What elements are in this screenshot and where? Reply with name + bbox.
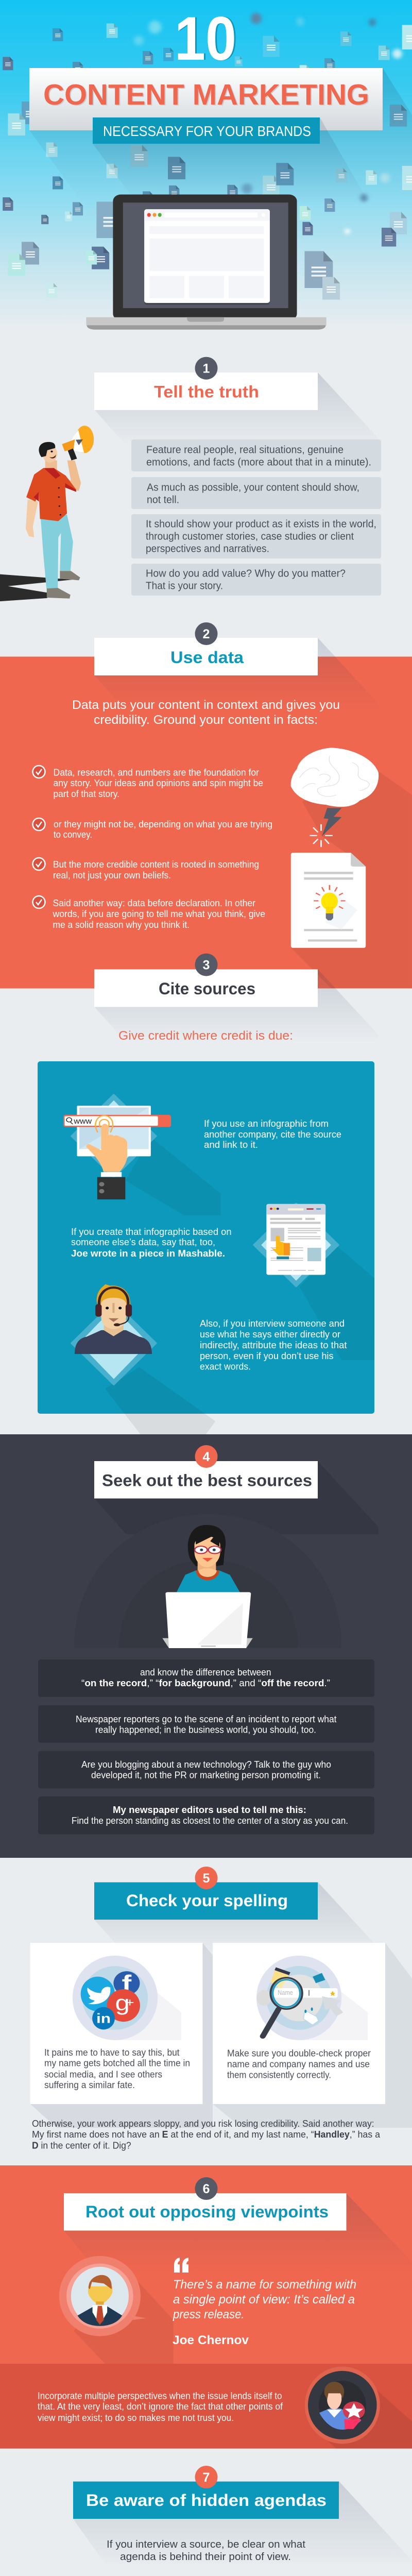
text boxes: How do you add value? Why do you matter? [146, 568, 346, 580]
number badge [195, 1867, 217, 1889]
heading card [94, 372, 318, 410]
intro text [72, 698, 340, 727]
checklist: me a solid reason why you think it. [53, 920, 190, 930]
heading card [94, 1461, 318, 1498]
icon: laptop [86, 195, 327, 330]
number badge: 4 [203, 1450, 210, 1464]
heading card [94, 970, 318, 1007]
subtitle band: NECESSARY FOR YOUR BRANDS [103, 123, 311, 139]
number badge: 7 [203, 2470, 210, 2485]
text box: newspaper reporters: Newspaper reporters go to the scene of an incident to report what [76, 1714, 337, 1724]
text: data citation [71, 1227, 232, 1259]
text box: blogging: developed it, not the PR or marketing person promoting it. [91, 1770, 321, 1781]
card: proper names [213, 1943, 385, 2104]
text: data citation: If you create that infographic based on [71, 1227, 232, 1237]
card text: social media, and I see others [44, 2069, 162, 2079]
number badge: 2 [203, 627, 210, 641]
blue panel [38, 1061, 374, 1414]
icon: social networks: in [96, 2011, 111, 2026]
checklist: But the more credible content is rooted in something [53, 859, 259, 870]
heading card [64, 2193, 346, 2231]
checklist: Data, research, and numbers are the foundation for [54, 768, 259, 778]
text boxes: It should show your product as it exists in the world, [146, 519, 376, 530]
icon: brain, lightning and idea document [291, 748, 412, 988]
intro text: Data puts your content in context and gives you [72, 698, 340, 712]
avatar: person with star badge [305, 2366, 412, 2449]
text: multiple perspectives [38, 2391, 283, 2423]
icon: woman at laptop [74, 1514, 341, 1648]
text: infographic source: If you use an infographic from [204, 1118, 329, 1129]
number badge: 6 [203, 2182, 210, 2196]
number badge: 3 [203, 958, 210, 972]
text box: editors: My newspaper editors used to tell me this: [113, 1805, 306, 1815]
text: attribution: indirectly, attribute the ideas to that [200, 1340, 347, 1350]
title number: 10 [175, 4, 236, 73]
card text: suffering a similar fate. [44, 2080, 135, 2090]
text box: newspaper reporters: really happened; in the business world, you should, too. [95, 1725, 316, 1735]
quote: There’s a name for something with [173, 2278, 356, 2292]
icon: social networks [73, 1956, 181, 2040]
text box: editors [38, 1797, 374, 1834]
text: otherwise: My first name does not have an E at the end of it, and my last name, “Handley,” has a [32, 2129, 381, 2140]
text boxes: As much as possible, your content should show, [147, 482, 359, 494]
checklist [33, 766, 272, 930]
card text: Make sure you double-check proper [227, 2048, 371, 2059]
title banner: CONTENT MARKETING [43, 78, 369, 111]
number badge: 1 [203, 362, 210, 376]
text: data citation: someone else’s data, say that, too, [71, 1237, 215, 1247]
heading card: Tell the truth [154, 382, 259, 401]
text: multiple perspectives: that. At the very least, don’t ignore the fact that other points of [38, 2401, 283, 2412]
heading card: Use data [170, 648, 244, 667]
number badge: 5 [203, 1871, 210, 1886]
icon: man with headset [72, 1284, 215, 1443]
text box: blogging: Are you blogging about a new technology? Talk to the guy who [81, 1759, 331, 1770]
heading card [94, 1883, 318, 1920]
checklist: to convey. [54, 829, 92, 840]
heading card [94, 638, 318, 675]
text: infographic source: and link to it. [204, 1140, 258, 1150]
icon: social networks: + [126, 1995, 134, 2009]
card text: name and company names and use [227, 2059, 370, 2070]
checklist: words, if you are going to tell me what you think, give [53, 909, 265, 919]
text box: blogging [38, 1751, 374, 1789]
intro text [107, 2539, 305, 2563]
panel: 1 tell the truth [0, 357, 381, 601]
card text: them consistently correctly. [227, 2070, 331, 2080]
subheading: Give credit where credit is due: [118, 1029, 293, 1043]
text box: difference [38, 1659, 374, 1697]
number badge [195, 622, 217, 645]
text: attribution: person, even if you don’t use his [200, 1351, 334, 1361]
panel: 7 be aware of hidden agendas [38, 2466, 412, 2576]
card text: It pains me to have to say this, but [44, 2047, 179, 2058]
icon: man with megaphone [0, 426, 94, 601]
text boxes: Feature real people, real situations, genuine [146, 445, 344, 456]
card text: my name gets botched all the time in [44, 2058, 190, 2068]
heading card: Seek out the best sources [102, 1471, 312, 1490]
checklist: Said another way: data before declaration. In other [53, 898, 255, 908]
number badge [195, 954, 217, 976]
icon: hand touching www bar: www [73, 1117, 92, 1126]
panel: hero [0, 0, 412, 330]
text box: difference: “on the record ,” “for background ,” and “off the record .” [81, 1678, 330, 1688]
panel: 3 cite sources [38, 954, 379, 1443]
text: otherwise [32, 2119, 381, 2150]
icon: magnifier over name field [256, 1956, 368, 2040]
quote [173, 2278, 356, 2347]
card text [227, 2048, 371, 2080]
floating document icons [3, 13, 412, 300]
panel: 5 check your spelling [30, 1867, 412, 2150]
heading card: Check your spelling [126, 1891, 288, 1910]
title banner: CONTENT MARKETING [44, 79, 370, 112]
heading card [73, 2482, 339, 2519]
card: social media [30, 1943, 202, 2104]
title number: 10 [176, 4, 238, 73]
heading card: Be aware of hidden agendas [86, 2491, 327, 2510]
quote: press release. [173, 2308, 244, 2321]
card text [44, 2047, 190, 2090]
text: multiple perspectives: view might exist; to do so makes me not trust you. [38, 2413, 234, 2423]
text: infographic source: another company, cite the source [204, 1129, 341, 1140]
icon: webpage with hand [254, 1204, 374, 1360]
heading card: Cite sources [159, 979, 255, 998]
text boxes: through customer stories, case studies or client [146, 531, 354, 543]
intro text: credibility. Ground your content in facts: [94, 713, 318, 727]
intro text: agenda is behind their point of view. [120, 2551, 291, 2563]
text: infographic source [204, 1118, 341, 1150]
text boxes: not tell. [147, 495, 179, 506]
number badge [195, 357, 217, 380]
checklist: or they might not be, depending on what you are trying [54, 819, 272, 829]
text boxes [131, 439, 381, 596]
panel: 2 use data [0, 622, 412, 988]
text: multiple perspectives: Incorporate multiple perspectives when the issue lends itself to [38, 2391, 282, 2401]
text box: newspaper reporters [38, 1705, 374, 1742]
text boxes: That is your story. [146, 581, 223, 592]
text: otherwise: D in the center of it. Dig? [32, 2140, 131, 2150]
text boxes: perspectives and narratives. [146, 544, 269, 555]
intro text: If you interview a source, be clear on what [107, 2539, 305, 2550]
icon: hand touching www bar [63, 1095, 221, 1215]
text: attribution: exact words. [200, 1361, 251, 1371]
text box: difference: and know the difference between [140, 1667, 271, 1677]
text box: editors: Find the person standing as closest to the center of a story as you can. [72, 1816, 348, 1826]
checklist: any story. Your ideas and opinions and spin might be [54, 778, 263, 788]
panel: 6 root out opposing viewpoints [0, 2165, 412, 2449]
panel: 4 seek out the best sources [0, 1434, 412, 1858]
text: attribution: Also, if you interview someone and [200, 1318, 345, 1329]
text: attribution: use what he says either directly or [200, 1329, 340, 1340]
title banner [29, 68, 383, 130]
icon: quotation marks [174, 2258, 188, 2273]
heading card: Root out opposing viewpoints [85, 2202, 329, 2221]
text: data citation: Joe wrote in a piece in Mashable. [71, 1248, 225, 1259]
icon: magnifier over name field: Name [278, 1989, 293, 1996]
icon: social networks: g [115, 1991, 130, 2015]
checklist: part of that story. [54, 789, 119, 799]
number badge [195, 2466, 217, 2488]
text: attribution [200, 1318, 347, 1371]
subtitle band [93, 117, 320, 144]
text boxes: emotions, and facts (more about that in a minute). [146, 457, 371, 468]
quote: a single point of view: It’s called a [173, 2293, 355, 2307]
number badge [195, 2177, 217, 2200]
text: otherwise: Otherwise, your work appears sloppy, and you risk losing credibility. Said another way: [32, 2119, 374, 2129]
number badge [195, 1445, 217, 1468]
icon: social networks: f [122, 1970, 132, 1997]
avatar: speech bubble [59, 2256, 174, 2364]
checklist: real, not just your own beliefs. [53, 870, 171, 880]
quote: Joe Chernov [173, 2333, 249, 2347]
